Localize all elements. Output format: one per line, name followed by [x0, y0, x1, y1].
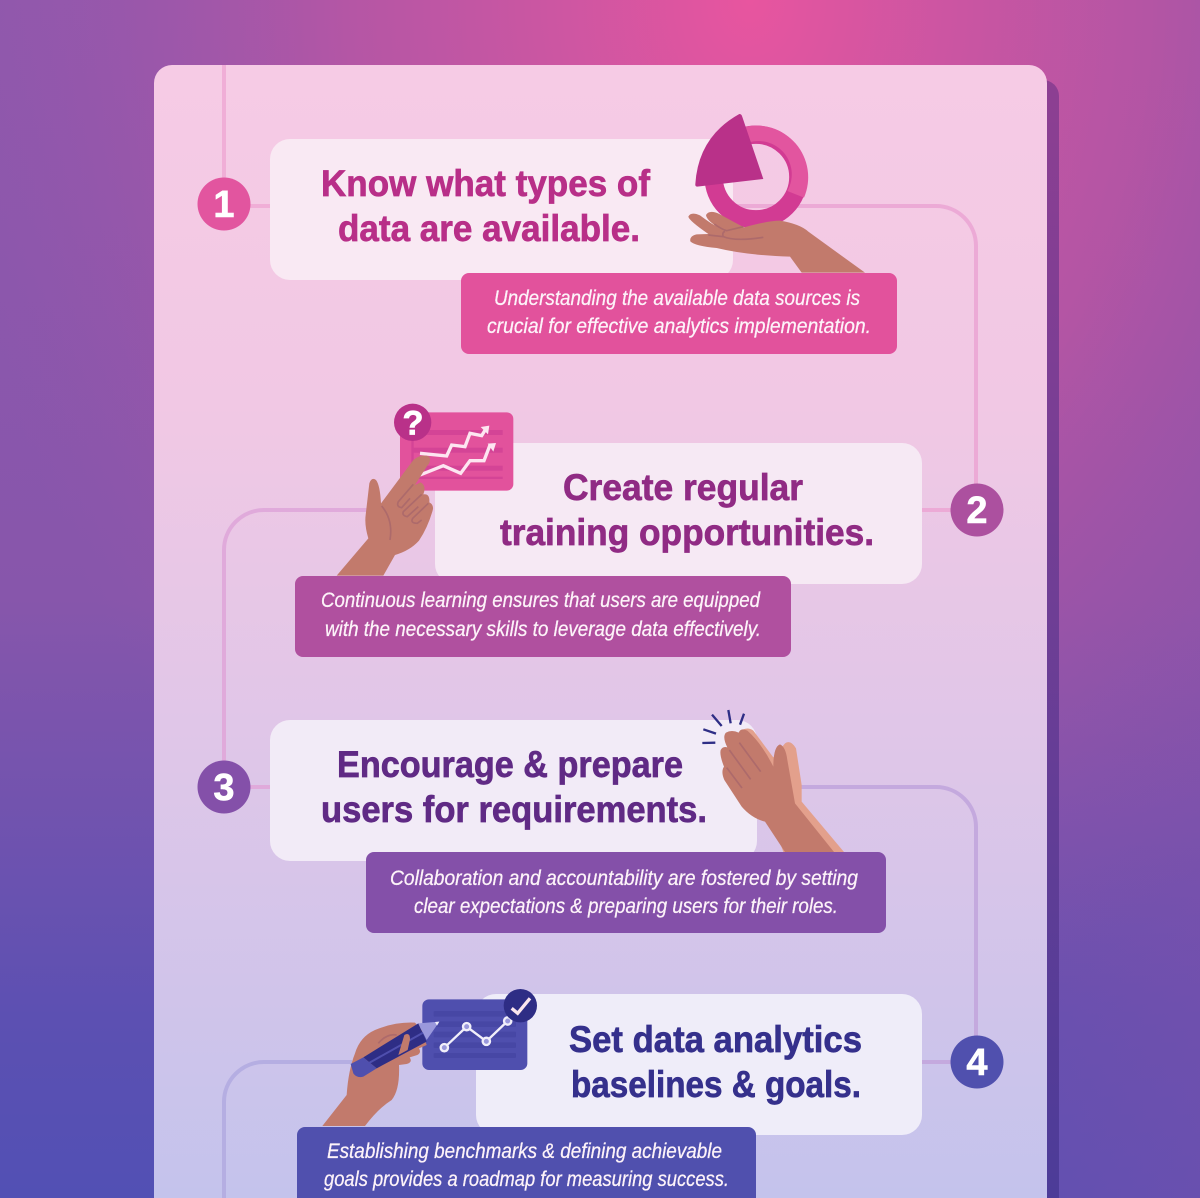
- number badge 2: 2: [966, 490, 988, 532]
- connector paths: [224, 65, 976, 1198]
- icon: chart card with pointing hand: [337, 404, 513, 576]
- step 3: [198, 710, 886, 933]
- heading 2: Create regular: [563, 467, 803, 508]
- description box 4: [297, 1127, 756, 1198]
- title card 1: [270, 139, 733, 280]
- description box 1: Understanding the available data sources is: [494, 287, 860, 310]
- heading 3: users for requirements.: [321, 789, 707, 830]
- number badge 2: [950, 484, 1004, 536]
- heading 2: training opportunities.: [500, 512, 874, 553]
- icon: chart card with pointing hand: ?: [402, 404, 424, 442]
- step 4: [297, 989, 1004, 1198]
- description box 3: [366, 852, 886, 933]
- main panel: [154, 65, 1047, 1198]
- number badge 4: [950, 1036, 1004, 1088]
- title card 4: [476, 994, 922, 1135]
- title card 3: [270, 720, 757, 861]
- heading 4: [569, 1019, 862, 1105]
- description box 4: goals provides a roadmap for measuring success.: [324, 1168, 729, 1191]
- number badge 3: [198, 760, 250, 814]
- heading 3: Encourage & prepare: [337, 744, 683, 785]
- step 2: [295, 404, 1004, 657]
- description box 2: [295, 576, 791, 657]
- description box 4: Establishing benchmarks & defining achievable: [327, 1140, 722, 1163]
- heading 3: [321, 744, 707, 830]
- number badge 4: 4: [966, 1042, 988, 1084]
- description box 3: clear expectations & preparing users for their roles.: [414, 895, 838, 918]
- description box 2: Continuous learning ensures that users are equipped: [321, 589, 761, 612]
- heading 2: [500, 467, 874, 553]
- description box 2: with the necessary skills to leverage data effectively.: [325, 618, 761, 641]
- heading 1: data are available.: [338, 208, 640, 249]
- heading 4: baselines & goals.: [571, 1064, 861, 1105]
- number badge 1: [198, 178, 250, 230]
- description box 1: crucial for effective analytics implementation.: [487, 315, 871, 338]
- icon: line chart with writing hand: [322, 989, 537, 1126]
- title card 2: [435, 443, 922, 584]
- description box 1: [461, 273, 897, 354]
- panel shadow: [900, 80, 1059, 1198]
- heading 4: Set data analytics: [569, 1019, 862, 1060]
- number badge 1: 1: [213, 184, 235, 226]
- description box 3: Collaboration and accountability are fostered by setting: [390, 867, 858, 890]
- icon: donut chart on hand: [688, 114, 865, 273]
- heading 1: [321, 163, 651, 249]
- icon: clapping hands: [702, 710, 844, 852]
- heading 1: Know what types of: [321, 163, 651, 204]
- number badge 3: 3: [213, 767, 235, 809]
- step 1: [198, 114, 897, 354]
